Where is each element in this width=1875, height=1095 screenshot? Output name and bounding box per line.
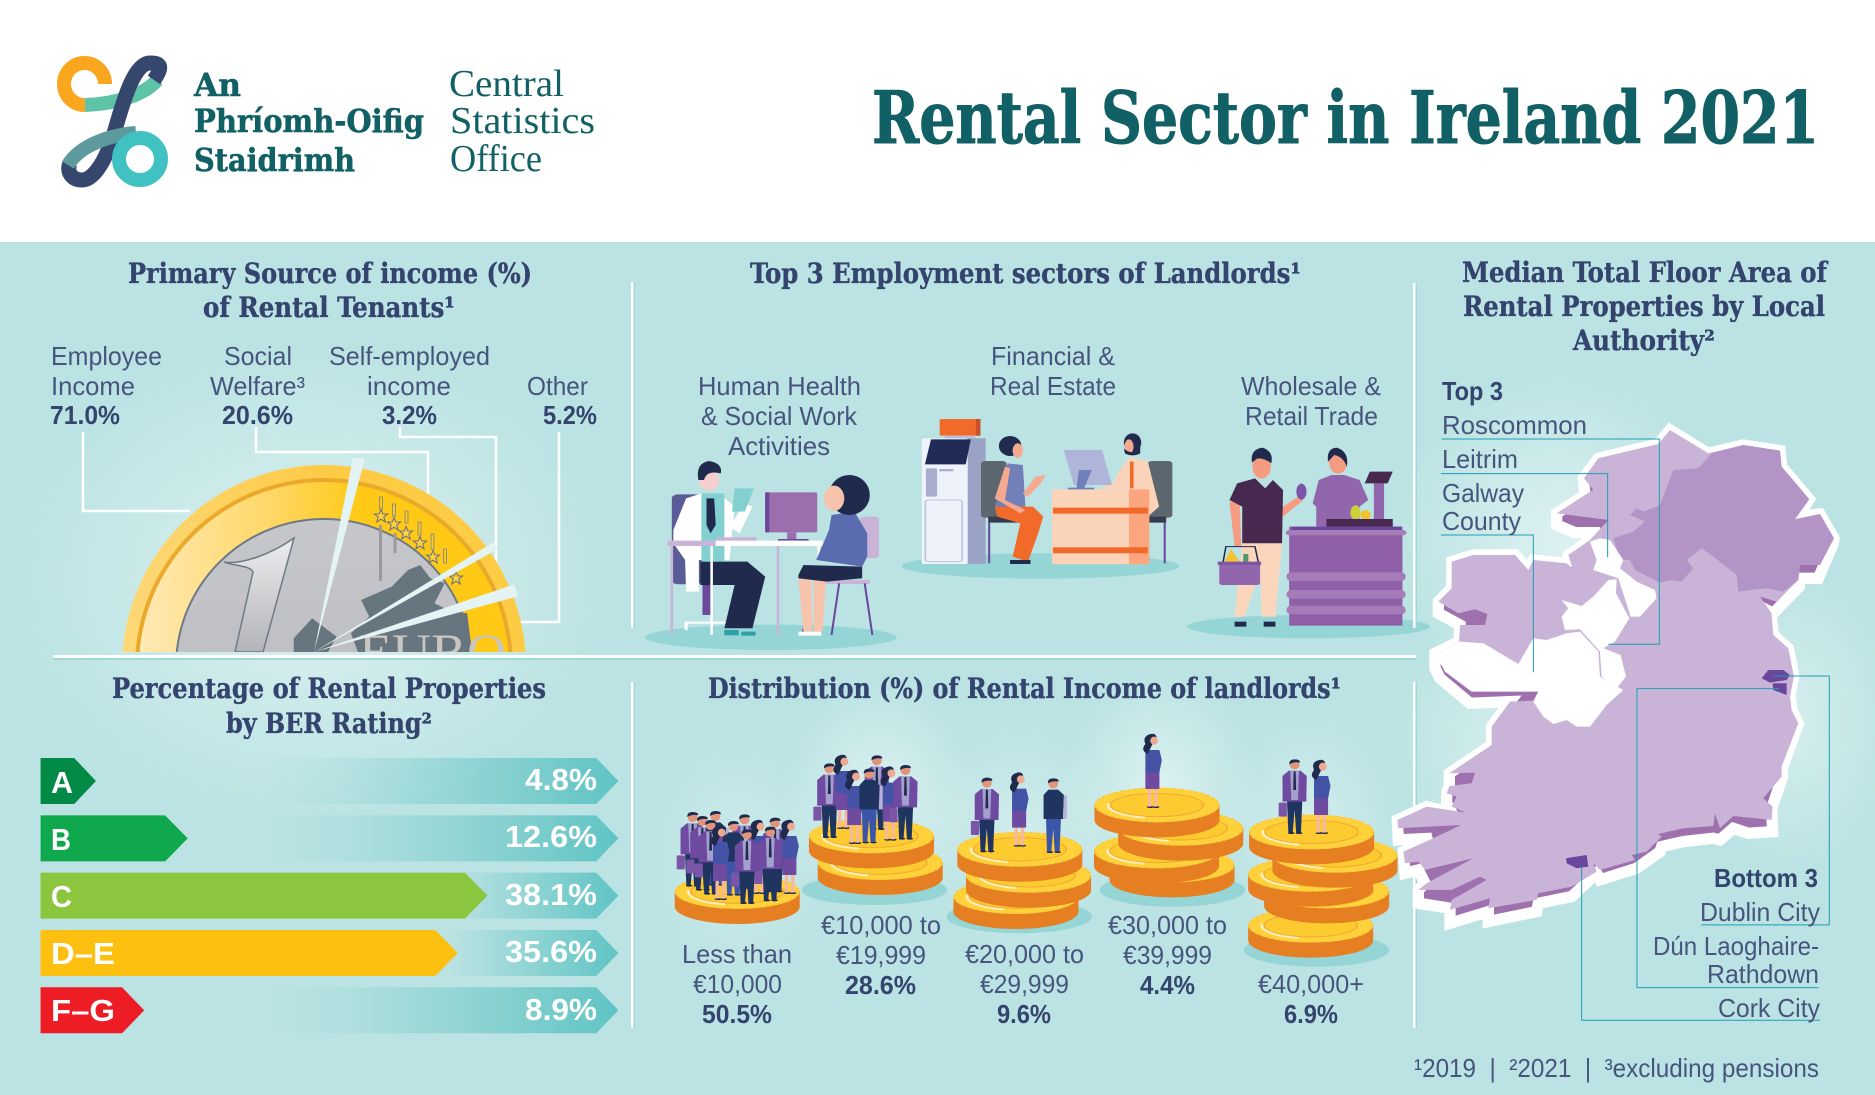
- icon: retail shop scene: [1187, 448, 1430, 638]
- list: bottom 3: Cork City: [1718, 993, 1820, 1023]
- label: financial and real estate: Real Estate: [990, 371, 1116, 401]
- label: employee income 71.0%: 71.0%: [50, 400, 120, 430]
- heading: employment sectors: Top 3 Employment sectors of Landlords¹: [750, 257, 1301, 290]
- leader lines: [83, 427, 559, 622]
- panel: BER rating: [41, 672, 618, 1033]
- heading: primary source of income: of Rental Tenants¹: [203, 291, 455, 324]
- header background: [0, 0, 1875, 242]
- label: financial and real estate: Financial &: [991, 341, 1115, 371]
- panel: top 3 employment sectors: [645, 257, 1430, 650]
- top 3: Galway County: [1436, 632, 1623, 727]
- dividers: [53, 282, 1417, 1028]
- label: self-employed income 3.2%: [329, 341, 490, 430]
- bar labels: ratings: F–G: [51, 993, 115, 1028]
- label: social welfare 20.6%: 20.6%: [222, 400, 293, 430]
- map land surface: [1397, 430, 1834, 910]
- heading: BER rating: [112, 672, 546, 740]
- icon: numeral one on coin: [224, 538, 294, 652]
- label: 30,000 to 39,999: 4.4%: [1140, 970, 1195, 1000]
- list: bottom 3: Rathdown: [1707, 959, 1819, 989]
- logo text: English name: Office: [450, 138, 542, 180]
- logo text: Irish name: Phríomh-Oifig: [194, 102, 424, 140]
- label: self-employed income 3.2%: 3.2%: [382, 400, 437, 430]
- panel: primary source of income: [51, 261, 596, 652]
- list: bottom 3: Dún Laoghaire-: [1653, 931, 1819, 961]
- bar labels: ratings: C: [51, 879, 72, 914]
- bar chart: BER rating arrows: [41, 758, 618, 1033]
- heading: median floor area: Median Total Floor Area of: [1462, 256, 1829, 289]
- top 3: Leitrim: [1590, 538, 1657, 617]
- stack: 20,000 to 29,999: [947, 772, 1092, 933]
- heading: median floor area: Authority²: [1572, 324, 1715, 357]
- logo text: English name: [449, 63, 595, 180]
- label: wholesale and retail: [1241, 371, 1381, 431]
- icon: CSO logo mark: [64, 63, 161, 180]
- heading: median floor area: [1462, 256, 1829, 357]
- heading: primary source of income: [128, 257, 532, 324]
- stars on coin: [374, 497, 462, 584]
- label: 10,000 to 19,999: 28.6%: [845, 970, 916, 1000]
- label: less than 10,000: [682, 939, 792, 1029]
- panel: distribution of rental income: [675, 672, 1397, 1029]
- label: 40,000 plus: [1258, 969, 1364, 1029]
- label: 10,000 to 19,999: [821, 910, 941, 1000]
- label: human health: Activities: [728, 431, 830, 461]
- label: 30,000 to 39,999: €39,999: [1123, 940, 1212, 970]
- body background: [0, 242, 1875, 1095]
- list: top 3: [1442, 376, 1587, 536]
- label: 10,000 to 19,999: €10,000 to: [821, 910, 941, 940]
- logo text: Irish name: An: [193, 66, 241, 104]
- leader lines: [1441, 439, 1829, 1020]
- label: 20,000 to 29,999: [965, 939, 1084, 1029]
- bar values: percentages: [505, 762, 597, 1027]
- chart: coin stacks with people: [675, 734, 1397, 967]
- list: top 3: Top 3: [1442, 376, 1503, 406]
- map of Europe on coin: [294, 565, 472, 655]
- label: other 5.2%: [527, 371, 597, 430]
- top 3: Roscommon: [1562, 579, 1629, 688]
- list: bottom 3: Bottom 3: [1714, 863, 1818, 893]
- label: less than 10,000: Less than: [682, 939, 792, 969]
- Northern counties region: [1613, 445, 1834, 592]
- slice gaps: [314, 458, 530, 652]
- logo text: Irish name: Staidrimh: [194, 141, 355, 179]
- label: financial and real estate: [990, 341, 1116, 401]
- logo text: Irish name: [193, 66, 424, 179]
- label: other 5.2%: Other: [527, 371, 588, 401]
- label: other 5.2%: 5.2%: [543, 400, 597, 430]
- bottom 3: Dun Laoghaire-Rathdown: [1773, 683, 1787, 695]
- label: social welfare 20.6%: Welfare³: [210, 371, 305, 401]
- label: 30,000 to 39,999: €30,000 to: [1108, 910, 1227, 940]
- stack: 40,000 plus: [1244, 759, 1397, 967]
- bar values: percentages: 12.6%: [505, 819, 597, 854]
- label: less than 10,000: 50.5%: [702, 999, 772, 1029]
- bar values: percentages: 8.9%: [525, 992, 597, 1027]
- panel: median floor area map: [1397, 256, 1834, 1023]
- list: bottom 3: Dublin City: [1700, 897, 1820, 927]
- list: top 3: Leitrim: [1442, 444, 1518, 474]
- label: 40,000 plus: 6.9%: [1284, 999, 1338, 1029]
- heading: primary source of income: Primary Source of income (%): [128, 257, 532, 290]
- chart: euro coin pie: [122, 458, 526, 652]
- label: 10,000 to 19,999: €19,999: [836, 940, 926, 970]
- background glows: [10, 340, 1875, 980]
- icon: doctor and patient scene: [645, 461, 897, 650]
- label: self-employed income 3.2%: Self-employed: [329, 341, 490, 371]
- label: human health: Human Health: [698, 371, 861, 401]
- bottom 3: Dublin City: [1762, 670, 1790, 683]
- bar values: percentages: 38.1%: [505, 877, 597, 912]
- label: 30,000 to 39,999: [1108, 910, 1227, 1000]
- label: 40,000 plus: €40,000+: [1258, 969, 1364, 999]
- label: less than 10,000: €10,000: [693, 969, 782, 999]
- list: top 3: Roscommon: [1442, 410, 1587, 440]
- heading: BER rating: Percentage of Rental Properties: [112, 672, 546, 705]
- bar labels: ratings: D–E: [51, 936, 115, 971]
- heading: distribution: Distribution (%) of Rental Income of landlords¹: [708, 672, 1341, 705]
- bottom 3: Cork City: [1566, 855, 1588, 868]
- label: human health: & Social Work: [701, 401, 858, 431]
- bar labels: ratings: [51, 765, 115, 1028]
- bar labels: ratings: A: [51, 765, 73, 800]
- label: 20,000 to 29,999: €20,000 to: [965, 939, 1084, 969]
- list: top 3: County: [1442, 506, 1521, 536]
- list: bottom 3: [1653, 863, 1820, 1023]
- heading: median floor area: Rental Properties by Local: [1463, 290, 1825, 323]
- label: wholesale and retail: Wholesale &: [1241, 371, 1381, 401]
- label: wholesale and retail: Retail Trade: [1245, 401, 1378, 431]
- label: 20,000 to 29,999: €29,999: [980, 969, 1069, 999]
- label: 20,000 to 29,999: 9.6%: [997, 999, 1051, 1029]
- heading: BER rating: by BER Rating²: [226, 707, 432, 740]
- logo text: English name: Statistics: [450, 100, 595, 142]
- label: employee income 71.0%: [50, 341, 162, 430]
- label: social welfare 20.6%: [210, 341, 305, 430]
- chart: euro coin pie: EURO: [359, 623, 506, 679]
- footnote: ¹2019 | ²2021 | ³excluding pensions: [1414, 1053, 1819, 1083]
- bar values: percentages: 4.8%: [525, 762, 597, 797]
- list: top 3: Galway: [1442, 478, 1524, 508]
- stack: less than 10,000: [675, 811, 800, 924]
- stack: 10,000 to 19,999: [802, 755, 947, 905]
- map silhouette with coast: [1397, 430, 1834, 923]
- label: social welfare 20.6%: Social: [224, 341, 292, 371]
- bar values: percentages: 35.6%: [505, 934, 597, 969]
- label: employee income 71.0%: Income: [51, 371, 135, 401]
- stack: 30,000 to 39,999: [1094, 734, 1245, 907]
- label: self-employed income 3.2%: income: [367, 371, 451, 401]
- label: human health: [698, 371, 861, 461]
- bar labels: ratings: B: [51, 822, 71, 857]
- label: employee income 71.0%: Employee: [51, 341, 162, 371]
- logo text: English name: Central: [449, 63, 564, 105]
- icon: bank teller and ATM scene: [902, 419, 1179, 579]
- map of Ireland: [1397, 430, 1834, 1020]
